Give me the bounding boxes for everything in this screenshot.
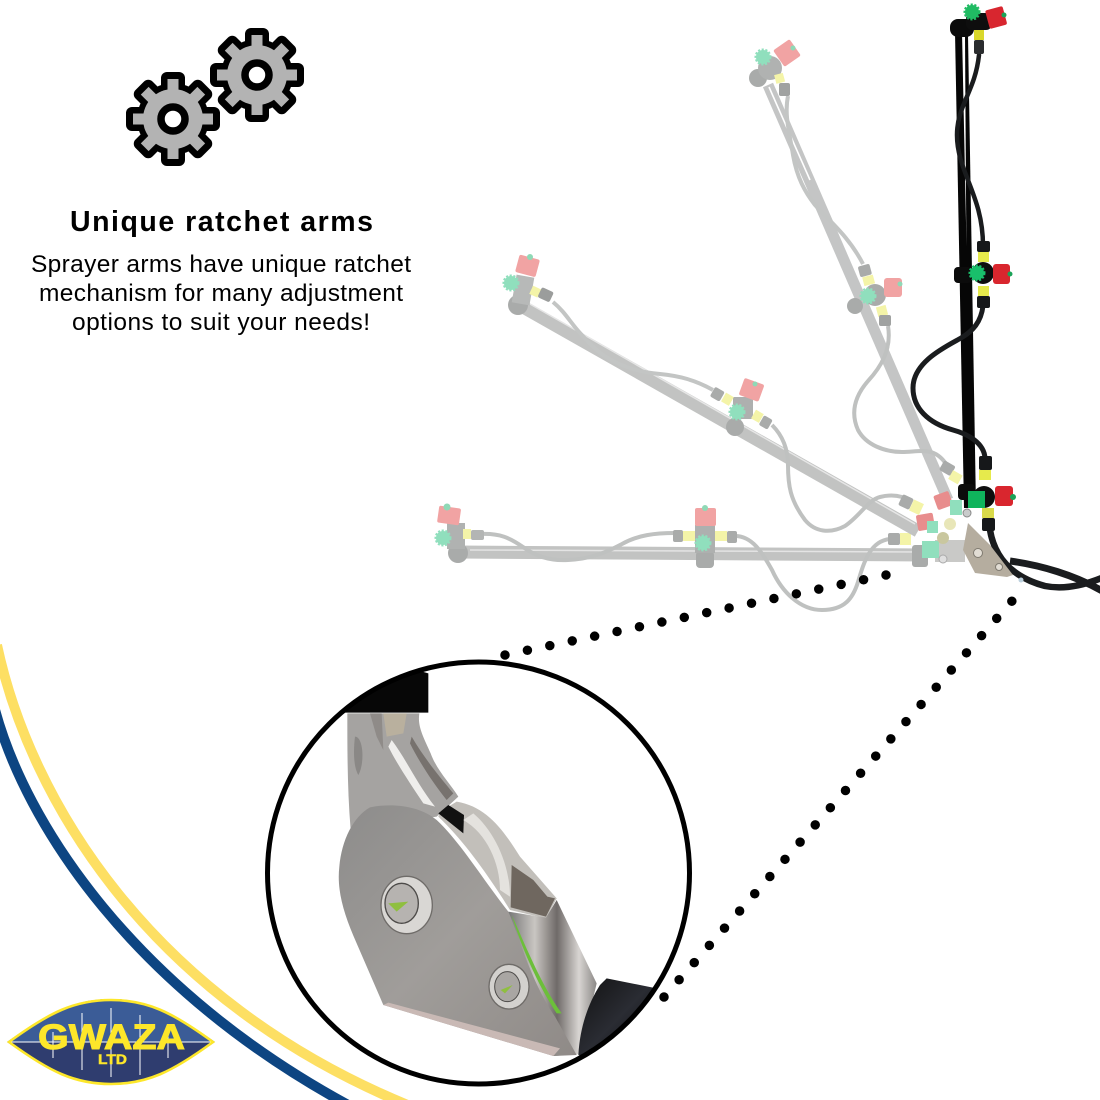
- large rivet: [381, 876, 432, 934]
- side plate: [339, 805, 577, 1056]
- ratchet wheel: [438, 802, 557, 918]
- black support poles: [955, 32, 976, 508]
- logo: Gwaza Ltd: LTD: [98, 1051, 127, 1067]
- icon: two gears: [126, 28, 304, 166]
- top nozzle: [950, 5, 1007, 54]
- faded sprayer arm: horizontal position: [436, 504, 965, 610]
- text block: description: [31, 251, 411, 336]
- faded sprayer arm: steep position: [749, 39, 963, 515]
- bottom nozzle: [958, 456, 1016, 531]
- callout: magnified ratchet bracket: [268, 662, 690, 1084]
- icon: right gear: [210, 28, 304, 122]
- upper black tube: [345, 672, 428, 713]
- text block: description: mechanism for many adjustment: [39, 280, 403, 307]
- text block: description: options to suit your needs!: [72, 309, 370, 336]
- logo: Gwaza Ltd: GWAZA: [38, 1018, 185, 1057]
- icon: left gear: [126, 72, 220, 166]
- faded sprayer arm: low diagonal position: [504, 254, 938, 533]
- plate bottom edge: [383, 1003, 560, 1056]
- middle nozzle: [954, 241, 1012, 308]
- decorative blue swoosh: [0, 706, 350, 1100]
- lower chrome arm: [508, 900, 597, 1056]
- small rivet: [489, 964, 529, 1009]
- dotted line: upper callout connector: [505, 575, 886, 655]
- upper chrome arm: [347, 713, 458, 830]
- black hoses: [913, 55, 1100, 592]
- decorative yellow swoosh: [0, 645, 410, 1100]
- bracket at base: [963, 509, 1024, 582]
- lower black sleeve: [578, 978, 657, 1060]
- dotted line: lower callout connector: [664, 601, 1012, 997]
- sprayer arm: upright black position: [913, 5, 1100, 592]
- heading: Unique ratchet arms: [70, 206, 373, 238]
- text block: description: Sprayer arms have unique ratchet: [31, 251, 411, 278]
- logo: Gwaza Ltd: [0, 995, 222, 1085]
